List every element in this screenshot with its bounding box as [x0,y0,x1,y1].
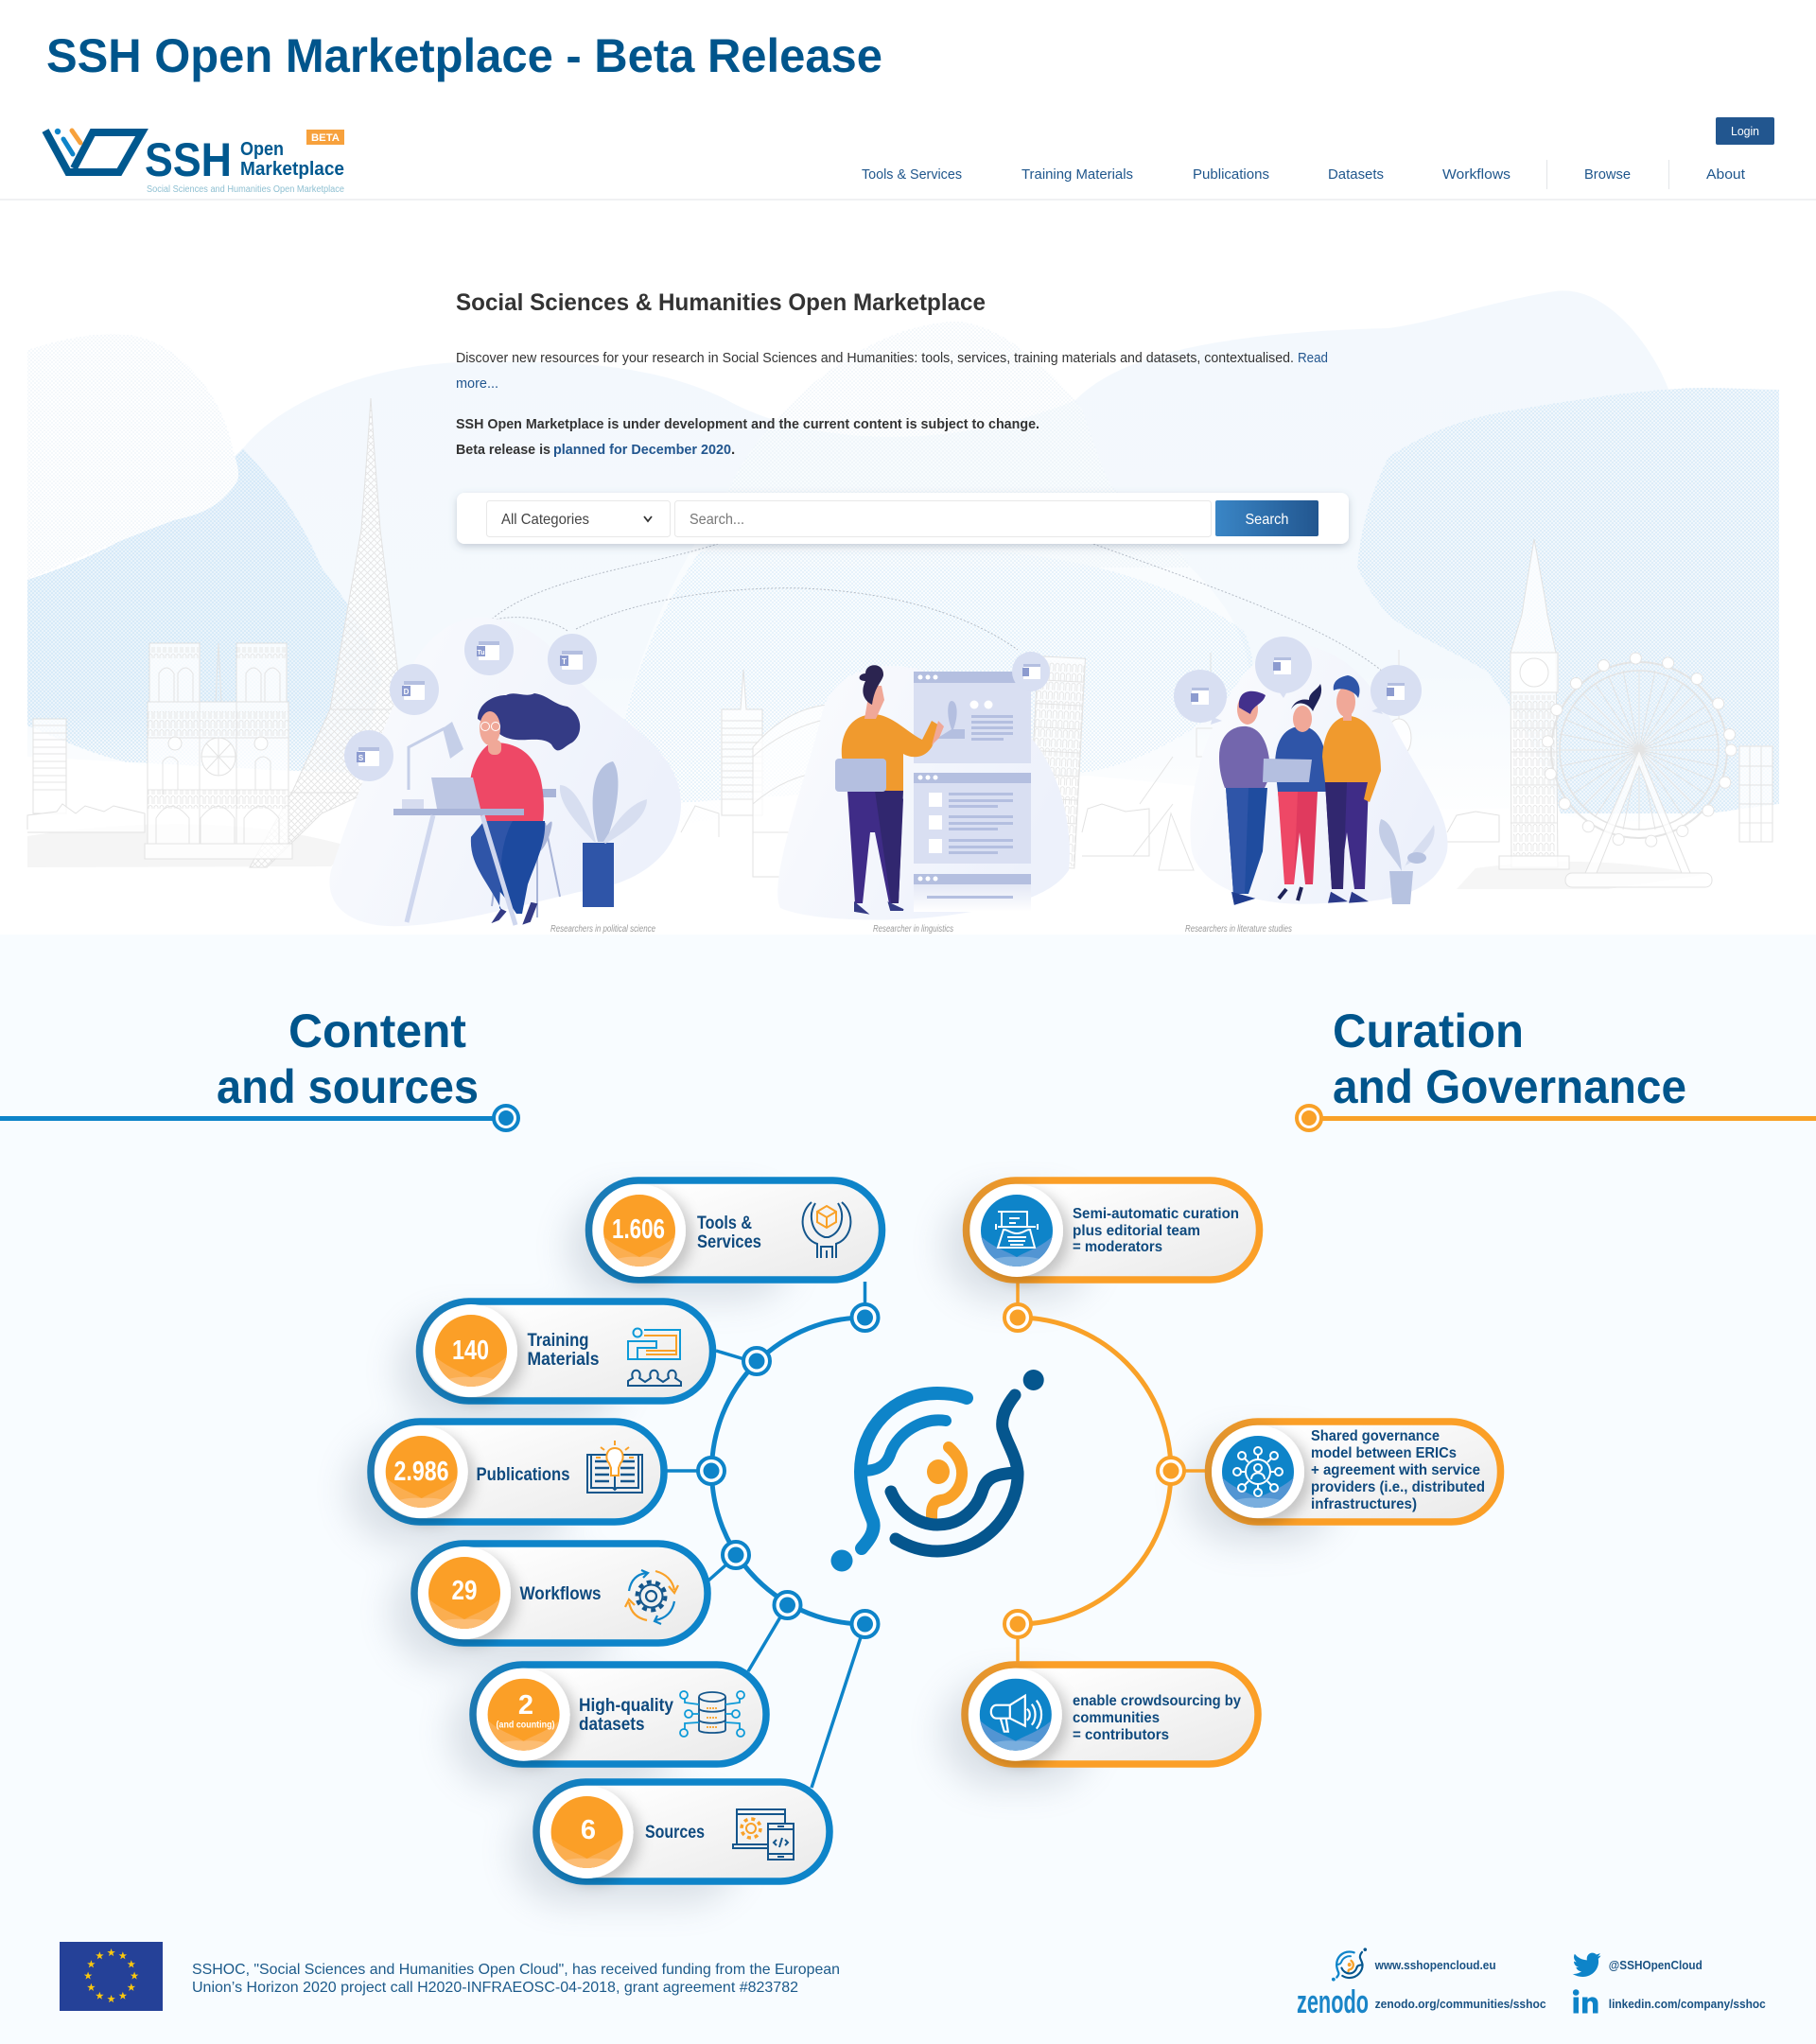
heading: Curation and Governance: Curation [1333,1005,1524,1057]
heading: Curation and Governance: and Governance [1333,1060,1686,1113]
pill: Workflows: Workflows [520,1584,602,1604]
blue connector network [666,1282,864,1788]
logo: SSH Open Marketplace: Open [240,139,284,160]
bubble: S document [344,730,393,781]
researcher captions: Researchers in literature studies [1185,924,1292,935]
hero development notice: planned for December 2020 [553,442,731,458]
pill: High-quality datasets: datasets [579,1715,645,1735]
pill: Training Materials: Training [528,1331,588,1351]
landmarks: Paris skyline with Notre-Dame and Eiffel Tower [27,398,445,867]
logo: SSH Open Marketplace: Social Sciences and Humanities Open Marketplace [147,184,344,195]
bubble: D document: D [404,688,410,696]
footer website link with small logo: www.sshopencloud.eu [1374,1958,1496,1972]
central SSHOC logo [830,1370,1044,1572]
search bar: All Categories [501,512,589,528]
hero development notice [456,416,1039,458]
logo: SSH Open Marketplace: Marketplace [240,159,344,180]
bubble: T document [548,634,597,685]
number circle: 1.606 [603,1195,675,1268]
researcher captions [550,924,1292,935]
EU flag [60,1942,163,2011]
pill: Semi-automatic curation [967,1180,1260,1280]
pill: Sources [536,1782,829,1881]
bubble: S document: S [358,754,364,762]
footer zenodo link: zenodo [1297,1984,1369,2020]
navigation menu: Publications [1193,166,1269,183]
number circle: 2.986 [386,1436,458,1510]
pill: Shared governance: + agreement with service [1311,1462,1480,1478]
connector nodes orange [1004,1304,1184,1637]
pill: High-quality datasets: 2 [518,1690,533,1721]
hero intro paragraph: Read [1298,350,1328,366]
heading: Content and sources: and sources [217,1060,479,1113]
bubble: Tu document: Tu [477,650,485,656]
pill: Shared governance [1209,1422,1500,1522]
heading: Curation and Governance [1297,1005,1816,1130]
login button [1716,117,1774,145]
pill: Shared governance: providers (i.e., distributed [1311,1479,1485,1495]
researcher in political science: blob, person, desk and plant [329,618,681,926]
connector nodes blue [698,1304,878,1637]
search bar: Search [1245,512,1288,528]
bubble: T document with pointer [1371,665,1422,716]
pill: Shared governance: model between ERICs [1311,1445,1457,1461]
researchers in literature studies: group of three with tablet and plant [1190,643,1447,904]
pill: enable crowdsourcing: = contributors [1073,1727,1169,1743]
white header and hero background [0,0,1816,935]
logo: SSH Open Marketplace [45,129,344,195]
navigation menu: About [1706,166,1746,183]
landmarks: London Big Ben and ferris wheel [1447,539,1772,887]
footer zenodo link: zenodo.org/communities/sshoc [1375,1997,1546,2011]
pill: Semi-automatic curation: plus editorial team [1073,1223,1200,1239]
researcher captions: Researchers in political science [550,924,655,935]
pill: Tools & Services: Tools & [697,1214,752,1233]
icon: database network [680,1691,744,1737]
orange connector network [1018,1282,1206,1663]
bubble: D document [390,664,439,715]
footer twitter link [1572,1953,1702,1977]
pill: Tools & Services [588,1180,882,1280]
pill: Training Materials: Materials [528,1350,600,1370]
hero illustration background shapes [27,290,1779,908]
pill: Shared governance: infrastructures) [1311,1496,1417,1512]
funding statement [192,1962,840,1996]
navigation menu: Browse [1584,166,1631,183]
bubble: T document: T [562,657,567,666]
hero development notice: SSH Open Marketplace is under development and the current content is subject to change. [456,416,1039,432]
pill: enable crowdsourcing: enable crowdsourcing by [1073,1693,1241,1709]
pill: Publications: 2.986 [393,1457,448,1487]
header divider [0,199,1816,201]
pill: Sources: 6 [581,1815,596,1845]
pill: enable crowdsourcing [965,1665,1258,1764]
icon: wrench and cube [803,1202,850,1258]
bubble: T document beside screens [1012,652,1050,691]
funding statement: Union’s Horizon 2020 project call H2020-INFRAEOSC-04-2018, grant agreement #823782 [192,1980,798,1996]
search bar: Search... [690,512,744,528]
pill shadows [348,1194,1337,1904]
logo: SSH Open Marketplace: BETA [311,132,340,144]
footer website link with small logo [1332,1948,1496,1982]
dotted connection curves between researchers [489,544,1383,672]
pill: Shared governance: Shared governance [1311,1428,1440,1444]
heading: Content and sources: Content [288,1005,466,1057]
number circle: 2 and counting [488,1679,560,1753]
pill: Tools & Services: 1.606 [612,1214,665,1245]
search bar [457,493,1349,544]
footer twitter link: @SSHOpenCloud [1609,1958,1702,1972]
hero intro paragraph: Discover new resources for your research in Social Sciences and Humanities: tools, services, training materials and datasets, contextualised. [456,350,1294,366]
researcher in linguistics: blob, person and screens [777,665,1070,920]
pill: Training Materials: 140 [452,1336,489,1366]
pill: Publications [371,1422,664,1522]
pill: High-quality datasets: High-quality [579,1696,673,1716]
footer linkedin link [1573,1989,1766,2013]
icon: gear with cycle arrows [625,1570,678,1624]
pill: Workflows [414,1544,707,1643]
icon: open book and light bulb [587,1441,642,1493]
pill: Training Materials [420,1302,713,1401]
icon circle: network person [1222,1436,1294,1510]
number circle: 6 [551,1796,623,1870]
hero intro paragraph [456,350,1328,392]
icon circle: megaphone [980,1679,1052,1753]
footer linkedin link: linkedin.com/company/sshoc [1609,1997,1766,2011]
pill: Semi-automatic curation: Semi-automatic curation [1073,1206,1239,1222]
logo: SSH Open Marketplace: SSH [145,133,232,186]
pill: Workflows: 29 [452,1576,477,1606]
navigation menu: Tools & Services [862,166,962,183]
number circle: 29 [428,1557,500,1631]
hero development notice: Beta release is [456,442,550,458]
footer zenodo link [1297,1984,1546,2020]
title: SSH Open Marketplace - Beta Release [46,29,882,82]
number circle: 140 [435,1315,507,1389]
hero heading: Social Sciences & Humanities Open Marketplace [456,289,986,316]
navigation menu: Workflows [1442,166,1510,183]
navigation menu: Datasets [1328,166,1384,183]
heading: Content and sources [0,1005,518,1130]
landmarks: central skyline with tower, Colosseum and Pisa [681,650,1411,877]
icon circle: typewriter [981,1195,1053,1268]
pill: Tools & Services: Services [697,1232,761,1252]
navigation menu: Training Materials [1022,166,1133,183]
pill: enable crowdsourcing: communities [1073,1710,1160,1726]
funding statement: SSHOC, "Social Sciences and Humanities Open Cloud", has received funding from the European [192,1962,840,1978]
researcher captions: Researcher in linguistics [873,924,953,935]
bubble: Tu document [464,624,514,675]
pill: Sources: Sources [645,1823,705,1843]
icon: laptop, phone and gear [733,1809,794,1860]
pill: High-quality datasets: (and counting) [496,1720,554,1731]
bubble: D document with pointer [1174,670,1227,725]
hero development notice: . [731,442,735,458]
login button: Login [1731,124,1759,138]
hero intro paragraph: more... [456,376,498,392]
pill: Semi-automatic curation: = moderators [1073,1239,1162,1255]
pill: Publications: Publications [477,1465,569,1485]
pill: High-quality datasets [473,1665,766,1764]
bubble: Tu document with pointer [1255,637,1312,698]
navigation menu [862,160,1746,189]
icon: presenter and audience [628,1328,681,1386]
